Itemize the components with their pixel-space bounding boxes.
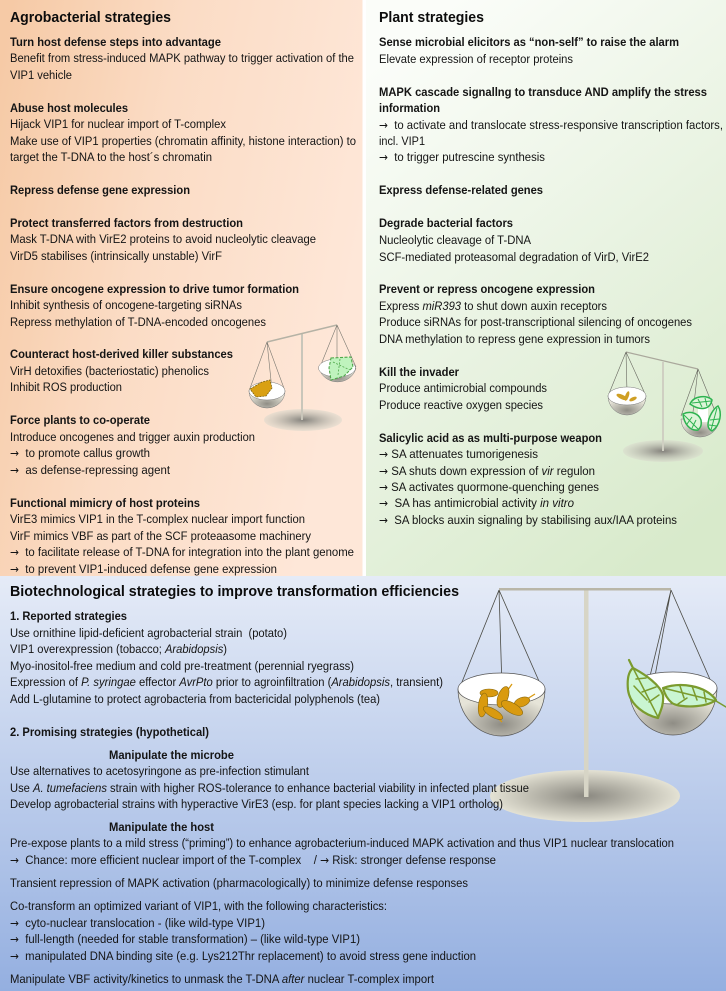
text block: repress defense gene expression: Repress defense gene expression [10,183,190,197]
text block: abuse host molecules: Abuse host molecules [10,101,128,115]
text block: functional mimicry: → to facilitate release of T-DNA for integration into the plant genome [10,545,354,559]
text block: force plants to co-operate: Force plants to co-operate [10,413,150,427]
heading: agrobacterial strategies: Agrobacterial strategies [10,10,171,26]
text block: turn host defense steps: Turn host defense steps into advantage [10,35,221,49]
text block: counteract host-derived killer substances: Inhibit ROS production [10,380,122,394]
text block: sense microbial elicitors: Elevate expression of receptor proteins [379,52,573,66]
text block: manipulate the microbe: Use A. tumefaciens strain with higher ROS-tolerance to enhance bacterial viability in infected plant tissue [10,781,529,795]
panel: biotechnological strategies [0,576,726,991]
text block: abuse host molecules: Hijack VIP1 for nuclear import of T-complex [10,117,226,131]
text block: manipulate the host: Manipulate VBF activity/kinetics to unmask the T-DNA after nuclear T-complex import [10,972,435,986]
text block: degrade bacterial factors: Degrade bacterial factors [379,216,513,230]
icon: leaves in right pan [628,660,726,718]
text block: abuse host molecules: target the T-DNA to the host´s chromatin [10,150,212,164]
text block: protect transferred factors: Mask T-DNA with VirE2 proteins to avoid nucleolytic cleavage [10,232,316,246]
text block: ensure oncogene expression: Ensure oncogene expression to drive tumor formation [10,282,299,296]
text block: MAPK cascade signalling: information [379,101,440,115]
text block: reported strategies: Use ornithine lipid-deficient agrobacterial strain (potato) [10,626,287,640]
text block: MAPK cascade signalling: MAPK cascade signallng to transduce AND amplify the stress [379,85,707,99]
text block: salicylic acid: Salicylic acid as as multi-purpose weapon [379,431,602,445]
text block: functional mimicry: VirE3 mimics VIP1 in the T-complex nuclear import function [10,512,305,526]
text block: degrade bacterial factors: SCF-mediated proteasomal degradation of VirD, VirE2 [379,250,649,264]
text block: manipulate the host: → full-length (needed for stable transformation) – (like wild-type VIP1) [10,932,360,946]
icon: agrobacteria in left pan [477,684,535,722]
text block: salicylic acid [379,431,677,527]
text block: reported strategies: Expression of P. syringae effector AvrPto prior to agroinfiltration (Arabidopsis, transient) [10,675,443,689]
text block: turn host defense steps: Benefit from stress-induced MAPK pathway to trigger activation of the [10,51,354,65]
text block: reported strategies: Add L-glutamine to protect agrobacteria from bactericidal polyphenols (tea) [10,692,380,706]
panel: agrobacterial strategies [0,0,362,577]
text block: turn host defense steps: VIP1 vehicle [10,68,72,82]
text block: salicylic acid: → SA blocks auxin signaling by stabilising aux/IAA proteins [379,513,677,527]
text block: force plants to co-operate: → as defense-repressing agent [10,463,171,477]
text block: manipulate the host: Pre-expose plants to a mild stress (“priming”) to enhance agrobacterium-induced MAPK activation and thus VIP1 nuclear translocation [10,836,674,850]
text block: salicylic acid: → SA has antimicrobial activity in vitro [379,496,574,510]
text block: express defense-related genes: Express defense-related genes [379,183,543,197]
text block: force plants to co-operate: → to promote callus growth [10,446,150,460]
text block: degrade bacterial factors [379,216,649,264]
text block: manipulate the host: Transient repression of MAPK activation (pharmacologically) to minimize defense responses [10,876,468,890]
heading: plant strategies: Plant strategies [379,10,484,26]
text block: functional mimicry: Functional mimicry of host proteins [10,496,200,510]
text block: abuse host molecules: Make use of VIP1 properties (chromatin affinity, histone interaction) to [10,134,356,148]
text block: ensure oncogene expression: Repress methylation of T-DNA-encoded oncogenes [10,315,266,329]
text block: prevent or repress oncogene expression [379,282,692,346]
text block: kill the invader: Produce reactive oxygen species [379,398,543,412]
icon: small balance tipping toward plant defense [608,352,720,462]
text block: promising strategies heading: 2. Promising strategies (hypothetical) [10,725,209,739]
text block: manipulate the microbe: Manipulate the microbe [109,748,234,762]
text block: sense microbial elicitors: Sense microbial elicitors as “non-self” to raise the alarm [379,35,679,49]
text block: abuse host molecules [10,101,356,164]
text block: manipulate the microbe: Use alternatives to acetosyringone as pre-infection stimulant [10,764,310,778]
text block: protect transferred factors [10,216,316,263]
icon: large balanced scale [458,588,726,822]
text block: reported strategies: VIP1 overexpression (tobacco; Arabidopsis) [10,642,227,656]
text block: sense microbial elicitors [379,35,679,66]
text block: functional mimicry: → to prevent VIP1-induced defense gene expression [10,562,277,576]
text block: MAPK cascade signalling: → to trigger putrescine synthesis [379,150,545,164]
text block: ensure oncogene expression: Inhibit synthesis of oncogene-targeting siRNAs [10,298,242,312]
text block: salicylic acid: → SA shuts down expression of vir regulon [379,464,595,478]
text block: kill the invader [379,365,547,412]
text block: MAPK cascade signalling [379,85,723,164]
text block: manipulate the host: → Chance: more efficient nuclear import of the T-complex / → Risk: stronger defense response [10,853,496,867]
text block: manipulate the host: Co-transform an optimized variant of VIP1, with the following characteristics: [10,899,387,913]
text block: manipulate the host [10,820,674,986]
text block: prevent or repress oncogene expression: Express miR393 to shut down auxin receptors [379,299,607,313]
text block: ensure oncogene expression [10,282,299,329]
text block: manipulate the host: → manipulated DNA binding site (e.g. Lys212Thr replacement) to avoid stress gene induction [10,949,476,963]
text block: protect transferred factors: VirD5 stabilises (intrinsically unstable) VirF [10,249,222,263]
text block: kill the invader: Produce antimicrobial compounds [379,381,547,395]
text block: MAPK cascade signalling: incl. VIP1 [379,134,425,148]
text block: prevent or repress oncogene expression: Produce siRNAs for post-transcriptional silencing of oncogenes [379,315,692,329]
text block: prevent or repress oncogene expression: DNA methylation to repress gene expression in tumors [379,332,650,346]
text block: functional mimicry: VirF mimics VBF as part of the SCF proteaasome machinery [10,529,312,543]
text block: manipulate the microbe: Develop agrobacterial strains with hyperactive VirE3 (esp. for plant species lacking a VIP1 ortholog) [10,797,503,811]
text block: prevent or repress oncogene expression: Prevent or repress oncogene expression [379,282,595,296]
text block: functional mimicry [10,496,354,576]
text block: salicylic acid: → SA activates quormone-quenching genes [379,480,599,494]
text block: counteract host-derived killer substances: VirH detoxifies (bacteriostatic) phenolics [10,364,209,378]
heading: biotechnological strategies: Biotechnological strategies to improve transformation efficiencies [10,584,459,600]
text block: manipulate the host: → cyto-nuclear translocation - (like wild-type VIP1) [10,916,265,930]
text block: reported strategies: Myo-inositol-free medium and cold pre-treatment (perennial ryegrass) [10,659,354,673]
icon: small balance tipping toward plant [249,325,356,431]
text block: degrade bacterial factors: Nucleolytic cleavage of T-DNA [379,233,532,247]
text block: protect transferred factors: Protect transferred factors from destruction [10,216,243,230]
text block: turn host defense steps [10,35,354,82]
text block: counteract host-derived killer substances: Counteract host-derived killer substances [10,347,233,361]
panel: plant strategies [366,0,726,577]
text block: manipulate the host: Manipulate the host [109,820,214,834]
text block: counteract host-derived killer substances [10,347,233,394]
text block: salicylic acid: → SA attenuates tumorigenesis [379,447,538,461]
text block: manipulate the microbe [10,748,529,811]
text block: force plants to co-operate: Introduce oncogenes and trigger auxin production [10,430,255,444]
text block: reported strategies [10,609,443,706]
text block: force plants to co-operate [10,413,255,477]
text block: kill the invader: Kill the invader [379,365,459,379]
text block: reported strategies: 1. Reported strategies [10,609,127,623]
